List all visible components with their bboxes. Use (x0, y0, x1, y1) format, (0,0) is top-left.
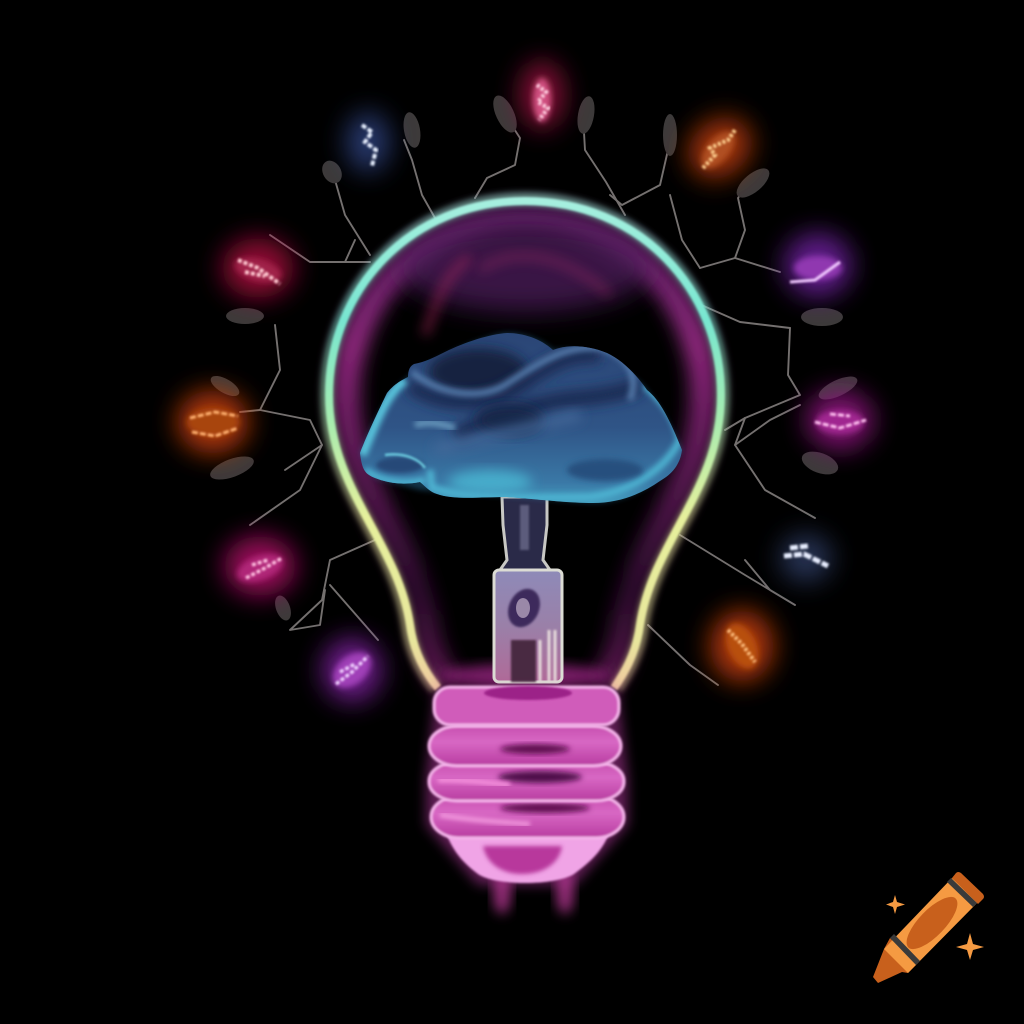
brain: lower right shadow (567, 459, 643, 481)
orb: lower right orange (710, 610, 774, 682)
glowing orbs ring (177, 61, 874, 702)
orb: right magenta (806, 390, 874, 450)
brain: left pocket (376, 457, 424, 473)
base: collar (445, 830, 610, 883)
illustration: glowing brain light bulb (159, 46, 984, 983)
logo: crayon watermark (873, 872, 984, 983)
stem: neck (500, 497, 550, 570)
orb: top left white-blue (346, 112, 390, 172)
glass: black interior (327, 200, 723, 688)
base: rib 4 (431, 796, 624, 838)
base: rib 2 (429, 726, 621, 766)
glass: purple haze in dome (400, 224, 650, 312)
glass: rim (329, 201, 721, 688)
logo: crayon cap (952, 872, 984, 904)
leaves: grey wire tips (207, 92, 860, 623)
brain (350, 325, 690, 510)
base: rays below (493, 870, 511, 914)
orb: left orange (177, 390, 249, 454)
logo: crayon body (884, 878, 978, 973)
logo: crayon bands (890, 878, 977, 965)
brain: dark central fold (410, 354, 640, 435)
brain: outer glow (360, 333, 682, 503)
screw base (426, 686, 628, 914)
glass: inner magenta band (346, 218, 704, 684)
orb: right purple upper (784, 233, 852, 297)
brain: body and folds (360, 333, 682, 503)
base: outer glow (426, 690, 628, 885)
glass: bottom pink haze (440, 664, 610, 688)
orb: left pink upper (222, 238, 294, 298)
logo: crayon tip (873, 938, 916, 983)
brain: cyan edges (362, 380, 405, 455)
brain: light ridges (412, 348, 633, 400)
wires: branching network around bulb (240, 115, 815, 685)
glass: rim glow (327, 199, 723, 688)
stem: body (494, 570, 562, 682)
logo: crayon oval (899, 890, 965, 956)
base: rib 3 (429, 762, 624, 801)
logo: small sparkle (886, 895, 905, 914)
orb: right white (780, 534, 832, 582)
base: rib 1 (434, 686, 619, 725)
orb: top pink (520, 61, 564, 129)
bulb glass (327, 199, 723, 688)
brain: dark top lobe (428, 348, 528, 396)
orb: top right orange (676, 105, 764, 191)
orb: bottom left purple (322, 638, 382, 702)
orb: lower left pink (224, 536, 296, 596)
logo: large sparkle (956, 933, 984, 960)
filament stem (494, 497, 562, 682)
